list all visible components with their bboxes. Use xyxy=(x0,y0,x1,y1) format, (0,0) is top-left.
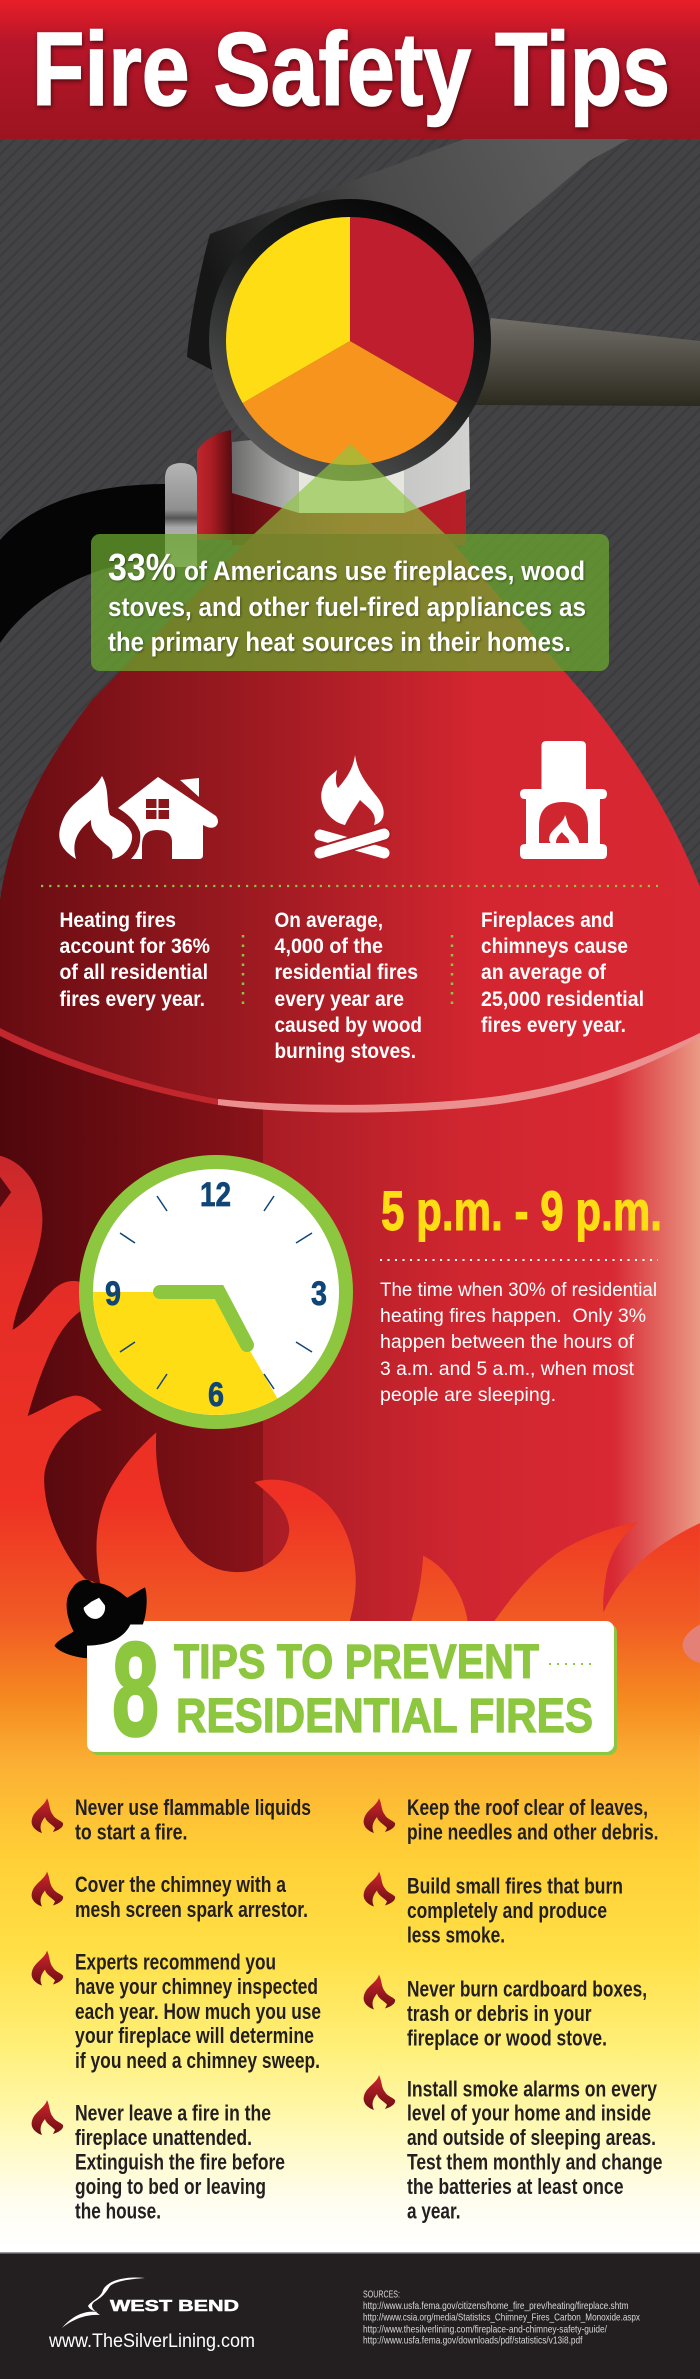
tip 7: trash or debris in your xyxy=(407,2001,592,2026)
tip 4: the house. xyxy=(75,2198,161,2224)
stat text: wood stoves: residential fires xyxy=(274,960,418,984)
vertical dotted divider xyxy=(242,935,244,1008)
callout text: stoves, and other fuel-fired appliances as xyxy=(108,592,586,622)
time description: The time when 30% of residential xyxy=(380,1279,657,1301)
tip 8 xyxy=(407,2076,662,2224)
gauge ring xyxy=(209,199,491,481)
stat text: heating fires: fires every year. xyxy=(60,987,205,1011)
time description xyxy=(380,1279,657,1406)
pie: yellow slice xyxy=(226,217,350,403)
tip 2: mesh screen spark arrestor. xyxy=(75,1897,308,1922)
stat text: wood stoves: 4,000 of the xyxy=(274,934,383,958)
logo swoosh xyxy=(62,2278,145,2328)
icon: firefighter helmet xyxy=(54,1580,147,1658)
sources: SOURCES: xyxy=(363,2288,400,2300)
tip 4 xyxy=(75,2100,285,2224)
tip 1: Never use flammable liquids xyxy=(75,1795,311,1820)
icon: tip flame xyxy=(32,1872,63,1906)
tip 4: going to bed or leaving xyxy=(75,2174,266,2199)
pie: orange slice xyxy=(243,341,457,465)
stat text: wood stoves xyxy=(274,908,422,1063)
lower extinguisher body dark side xyxy=(0,1020,264,1730)
clock rim xyxy=(79,1155,353,1429)
sources: http://www.thesilverlining.com/fireplace-and-chimney-safety-guide/ xyxy=(363,2324,607,2336)
tips heading box xyxy=(87,1616,617,1764)
title banner xyxy=(0,0,700,139)
stat text: heating fires: account for 36% xyxy=(60,934,210,958)
stat text: wood stoves: burning stoves. xyxy=(274,1039,416,1063)
tip 5 xyxy=(407,1795,658,1844)
icon: tip flame xyxy=(32,1798,63,1833)
tip 3 xyxy=(75,1950,321,2073)
horizontal dotted divider xyxy=(41,885,658,887)
callout text: the primary heat sources in their homes. xyxy=(108,627,571,657)
tip 4: Never leave a fire in the xyxy=(75,2100,271,2126)
stat text: wood stoves: On average, xyxy=(274,908,383,932)
extinguisher dome xyxy=(0,534,700,1105)
clock numerals: 3 xyxy=(311,1275,327,1313)
tip 4: fireplace unattended. xyxy=(75,2125,252,2150)
heading line 2: RESIDENTIAL FIRES xyxy=(176,1690,593,1743)
stat text: heating fires xyxy=(60,908,210,1011)
tip 3: if you need a chimney sweep. xyxy=(75,2048,320,2073)
clock hands xyxy=(160,1292,247,1345)
icon: campfire xyxy=(320,755,384,853)
clock numerals: 6 xyxy=(208,1376,224,1414)
clock numerals xyxy=(105,1176,327,1414)
clock face xyxy=(93,1169,339,1415)
tips list right xyxy=(364,1795,662,2224)
highlighted time wedge xyxy=(93,1292,278,1415)
tip 4: Extinguish the fire before xyxy=(75,2150,285,2174)
stat text: fireplaces: chimneys cause xyxy=(481,934,628,958)
icon: tip flame xyxy=(32,2100,63,2135)
icon: tip flame xyxy=(364,1798,395,1833)
sources: http://www.usfa.fema.gov/citizens/home_fire_prev/heating/fireplace.shtm xyxy=(363,2300,629,2312)
sources: http://www.usfa.fema.gov/downloads/pdf/statistics/v13i8.pdf xyxy=(363,2334,583,2346)
red pipe xyxy=(197,430,234,540)
icon: tip flame xyxy=(364,1974,395,2010)
callout text: 33% xyxy=(108,547,176,589)
stat text: fireplaces xyxy=(481,908,644,1037)
time description: 3 a.m. and 5 a.m., when most xyxy=(380,1358,635,1380)
tip 6: completely and produce xyxy=(407,1898,607,1923)
tip 6 xyxy=(407,1874,623,1948)
stat text: fireplaces: Fireplaces and xyxy=(481,908,614,932)
tip 2: Cover the chimney with a xyxy=(75,1872,287,1897)
stat text: heating fires: Heating fires xyxy=(60,908,176,932)
tip 3: your fireplace will determine xyxy=(75,2023,314,2048)
time description: people are sleeping. xyxy=(380,1384,556,1406)
tip 7: fireplace or wood stove. xyxy=(407,2026,607,2050)
callout text xyxy=(108,547,586,657)
band highlight xyxy=(218,1033,700,1113)
red collar xyxy=(232,480,466,545)
tip 3: Experts recommend you xyxy=(75,1950,276,1974)
clock xyxy=(79,1155,353,1429)
stat text: wood stoves: every year are xyxy=(274,987,404,1011)
clock numerals: 9 xyxy=(105,1275,121,1313)
icon: tip flame xyxy=(364,1872,395,1906)
icon: fireplace xyxy=(520,741,607,859)
icon: tip flame xyxy=(32,1950,63,1986)
gauge xyxy=(209,199,491,481)
tips list left xyxy=(32,1795,321,2224)
extinguisher illustration xyxy=(0,139,700,1105)
stat text: fireplaces: an average of xyxy=(481,960,607,984)
tip 1: to start a fire. xyxy=(75,1820,188,1844)
callout box xyxy=(91,534,609,671)
icon: flame and house xyxy=(59,776,218,859)
grey connector xyxy=(165,463,197,567)
stat text: fireplaces: fires every year. xyxy=(481,1013,626,1037)
hour ticks xyxy=(120,1196,312,1389)
hose xyxy=(0,484,165,643)
tip 2 xyxy=(75,1872,308,1922)
tip 3: have your chimney inspected xyxy=(75,1974,318,1999)
big numeral 8: 8 xyxy=(112,1616,159,1764)
white dotted divider xyxy=(380,1259,658,1261)
neck highlight xyxy=(299,470,404,513)
lower extinguisher body lit side xyxy=(263,1020,700,1735)
time description: happen between the hours of xyxy=(380,1331,635,1353)
tip 3: each year. How much you use xyxy=(75,1999,321,2024)
website: www.TheSilverLining.com xyxy=(48,2331,255,2352)
vertical dotted divider xyxy=(451,935,453,1008)
logo wordmark: WEST BEND xyxy=(110,2298,239,2315)
stat text: fireplaces: 25,000 residential xyxy=(481,987,644,1011)
tip 6: less smoke. xyxy=(407,1922,505,1948)
tip 7 xyxy=(407,1976,647,2050)
dome lower edge xyxy=(0,1028,218,1105)
icon: tip flame xyxy=(364,2075,395,2110)
top lever xyxy=(187,139,629,370)
stat text: heating fires: of all residential xyxy=(60,960,208,984)
callout text: of Americans use fireplaces, wood xyxy=(184,556,585,586)
heading line 1: TIPS TO PREVENT xyxy=(174,1636,539,1689)
discharge hose right xyxy=(473,318,700,406)
tip 6: Build small fires that burn xyxy=(407,1874,623,1898)
time description: heating fires happen. Only 3% xyxy=(380,1305,646,1327)
stat text: wood stoves: caused by wood xyxy=(274,1013,422,1037)
tip 1 xyxy=(75,1795,311,1844)
tip 8: the batteries at least once xyxy=(407,2174,624,2199)
sources xyxy=(363,2288,641,2346)
flames xyxy=(0,1156,700,2245)
pie: red slice xyxy=(350,217,474,403)
tip 8: a year. xyxy=(407,2198,460,2224)
footer xyxy=(0,2252,700,2379)
clock numerals: 12 xyxy=(200,1176,231,1214)
page background xyxy=(0,139,700,1099)
valve neck xyxy=(232,417,470,513)
callout pointer xyxy=(254,444,445,534)
